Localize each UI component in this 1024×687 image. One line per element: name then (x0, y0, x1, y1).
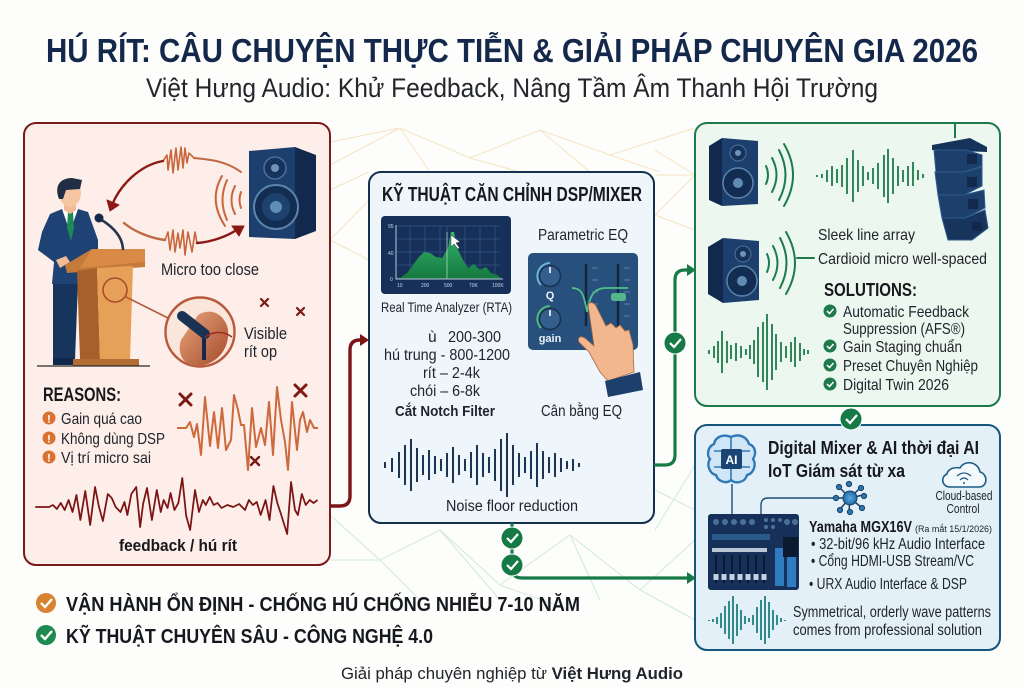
panel: solutions (695, 123, 1000, 406)
icon: speaker top (709, 138, 758, 206)
solutions list: Suppression (AFS®) (843, 321, 965, 338)
chart: clean wave top (817, 149, 923, 203)
heading: reasons: REASONS: (43, 385, 121, 406)
label: visible rit op: Visible (244, 325, 287, 343)
label: feedback: feedback / hú rít (119, 536, 237, 555)
reasons list: Vị trí micro sai (61, 450, 151, 467)
callout: microphone close-up (126, 297, 234, 366)
solutions list: Digital Twin 2026 (843, 377, 949, 394)
chart: real time analyzer: 100K (492, 283, 504, 289)
chart: real time analyzer: 200 (421, 283, 430, 289)
panel: causes of feedback (24, 123, 330, 565)
caption: wave patterns (793, 604, 991, 639)
solutions list: Automatic Feedback (843, 304, 970, 321)
panel: DSP mixer technique (369, 172, 654, 523)
sound arcs top (766, 144, 793, 206)
chart: real time analyzer: 40 (388, 251, 394, 257)
label: RTA: Real Time Analyzer (RTA) (381, 299, 512, 315)
parametric EQ panel (528, 253, 638, 350)
reasons list (42, 411, 165, 467)
icon: check on arrow lower top (501, 527, 523, 549)
heading: Yamaha MGX16V: Yamaha MGX16V (809, 519, 912, 536)
icon: AI brain (708, 435, 755, 482)
heading: technique: KỸ THUẬT CĂN CHỈNH DSP/MIXER (382, 182, 642, 206)
mixer features: • Cổng HDMI-USB Stream/VC (811, 553, 974, 570)
arrow: causes to technique (330, 334, 369, 506)
frequency list: 200-300 (448, 329, 501, 346)
label: noise floor: Noise floor reduction (446, 498, 578, 515)
frequency list: chói – 6-8k (410, 383, 480, 400)
icon: mixer (708, 514, 799, 590)
icon: speaker at podium (38, 178, 98, 365)
icon: check between panels (840, 408, 862, 430)
chart: real time analyzer: 500 (444, 283, 453, 289)
sound arcs bottom (767, 232, 814, 294)
chart: real time analyzer (381, 216, 511, 294)
reasons list: ! (47, 414, 51, 426)
footer: Giải pháp chuyên nghiệp từ Việt Hưng Audio (341, 665, 683, 683)
icon: cloud (943, 463, 986, 487)
label: release date: (Ra mắt 15/1/2026) (915, 524, 992, 535)
heading: digital mixer (768, 438, 979, 481)
heading: digital mixer: Digital Mixer & AI thời đại AI (768, 438, 979, 458)
arrow: technique to solutions (654, 264, 696, 465)
label: micro too close: Micro too close (161, 261, 259, 279)
label: cloud control: Cloud-based (936, 489, 993, 503)
label: cloud control: Control (946, 502, 980, 516)
icon: check on arrow right (664, 332, 686, 354)
icon: loudspeaker (249, 147, 316, 239)
connector: brain to mixer (731, 484, 733, 514)
label: parametric EQ: Parametric EQ (538, 227, 628, 244)
caption: wave patterns: comes from professional solution (793, 622, 982, 639)
chart: real time analyzer: 0 (390, 277, 393, 283)
frequency list: hú trung - 800-1200 (384, 347, 510, 364)
label: line array: Sleek line array (818, 227, 915, 244)
heading: digital mixer: IoT Giám sát từ xa (768, 461, 906, 481)
icon: speaker bottom (708, 238, 759, 303)
chart: chaotic orange waveform (177, 387, 318, 470)
reasons list: ! (47, 452, 51, 464)
icon: line array (932, 123, 988, 240)
label: cardioid: Cardioid micro well-spaced (818, 251, 987, 268)
label: cloud control (936, 489, 993, 516)
arrow: technique to mixer (512, 523, 696, 584)
frequency list: rít – 2-4k (423, 365, 480, 382)
label: EQ balance: Cân bằng EQ (541, 403, 622, 420)
icon: check on arrow lower bottom (501, 554, 523, 576)
mixer features (809, 536, 985, 593)
subtitle: Việt Hưng Audio: Khử Feedback, Nâng Tầm Âm Thanh Hội Trường (146, 72, 878, 103)
reasons list: Gain quá cao (61, 411, 142, 428)
solutions list: Gain Staging chuẩn (843, 338, 962, 356)
chart: real time analyzer: 10 (397, 283, 403, 289)
callout: stable operation: VẬN HÀNH ỔN ĐỊNH - CHỐNG HÚ CHỐNG NHIỄU 7-10 NĂM (66, 592, 580, 616)
icon: podium (37, 249, 150, 366)
reasons list: ! (47, 434, 51, 446)
heading: solutions: SOLUTIONS: (824, 280, 917, 300)
panel: digital mixer and AI (695, 425, 1000, 650)
icon: microphone on podium (94, 214, 123, 249)
solutions list: Preset Chuyên Nghiệp (843, 358, 978, 375)
icon: hand adjusting EQ (578, 303, 643, 397)
callout: deep technology: KỸ THUẬT CHUYÊN SÂU - CÔNG NGHỆ 4.0 (66, 624, 433, 648)
connector: hub to mixer (761, 498, 833, 514)
chart: real time analyzer: 70K (469, 283, 479, 289)
chart: real time analyzer: 95 (388, 224, 394, 230)
frequency list (384, 329, 510, 400)
chart: symmetrical wave (709, 596, 785, 644)
label: visible rit op: rít op (244, 343, 277, 361)
feedback loop arrows (107, 147, 244, 255)
label: notch filter: Cắt Notch Filter (395, 402, 495, 420)
icon: IoT hub (833, 481, 867, 515)
chart: clean wave bottom (709, 314, 808, 390)
sound arcs (216, 176, 241, 226)
frequency list: ù (428, 329, 437, 346)
reasons list: Không dùng DSP (61, 431, 165, 448)
icon: AI brain: AI (726, 453, 738, 467)
solutions list (824, 304, 978, 394)
chart: noise floor waveform (385, 433, 579, 497)
mixer features: • 32-bit/96 kHz Audio Interface (811, 536, 985, 553)
label: visible rit op (244, 325, 287, 361)
parametric EQ panel: gain (539, 333, 562, 345)
mixer features: • URX Audio Interface & DSP (809, 576, 967, 593)
chart: feedback waveform (35, 478, 318, 534)
icon: red crosses (180, 299, 306, 465)
parametric EQ panel: Q (546, 290, 555, 302)
